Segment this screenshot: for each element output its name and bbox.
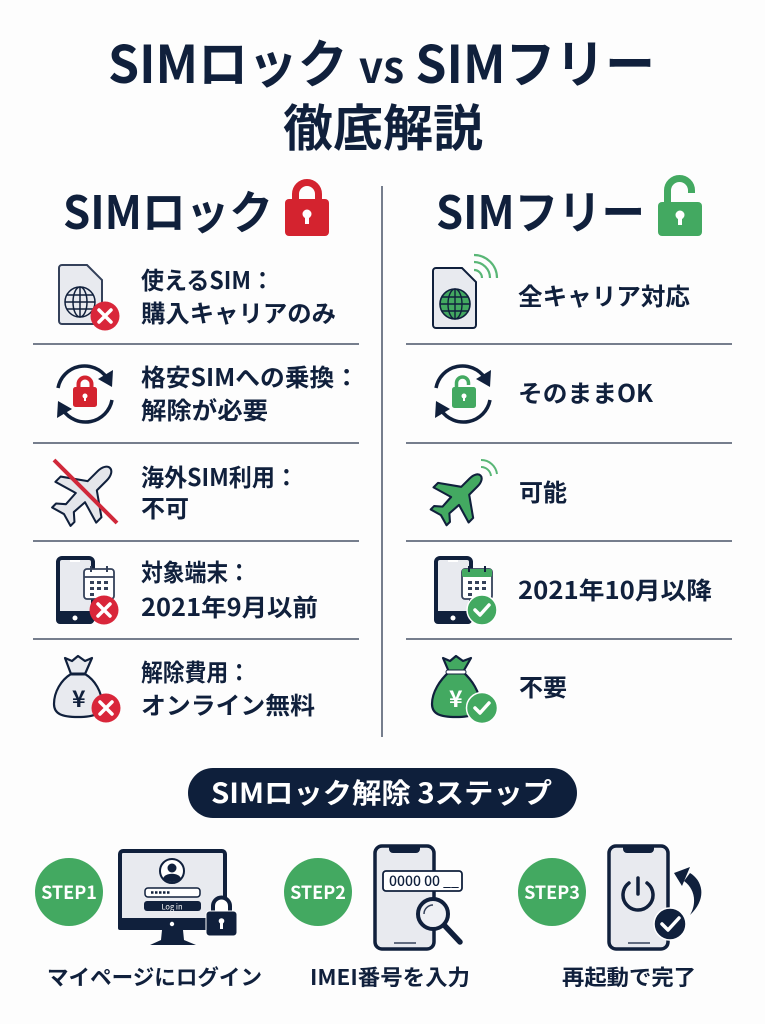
row: overseas OK [421, 458, 567, 535]
text: not required: 不要 [519, 668, 567, 703]
text: unlock fee: オンライン無料 [141, 686, 315, 721]
caption: enter IMEI: IMEI番号を入力 [310, 961, 470, 992]
panel: SIM lock column [33, 177, 359, 722]
row: target devices [56, 553, 318, 624]
text: as-is OK: そのままOK [518, 374, 654, 409]
title [108, 23, 655, 161]
caption: restart to finish: 再起動で完了 [562, 961, 696, 992]
icon: money bag with x: ¥ [72, 680, 86, 714]
row: overseas SIM [41, 448, 298, 537]
badge: STEP1: STEP1 [41, 879, 97, 905]
row: switching to budget SIM [57, 358, 359, 426]
text: target devices: 2021年9月以前 [141, 588, 318, 623]
section heading pill: 3 steps [188, 768, 577, 818]
text: usable SIM: 購入キャリアのみ [141, 294, 336, 329]
text: usable SIM: 使えるSIM： [141, 261, 274, 296]
icon: green plane with signal [421, 458, 498, 535]
row: target devices free [434, 558, 712, 625]
badge: STEP2 [284, 858, 352, 926]
text: target devices: 対象端末： [141, 553, 250, 588]
text: date free: 2021年10月以降 [518, 571, 712, 606]
panel: SIM free column [406, 177, 732, 724]
step 3 [518, 846, 701, 992]
text: overseas SIM: 不可 [141, 489, 189, 524]
row: unlock fee [54, 653, 315, 722]
icon: phone with IMEI field and magnifier [375, 846, 462, 949]
icon: monitor login with lock: Log in [161, 902, 183, 912]
icon: money bag with x [54, 656, 120, 722]
text: switching: 格安SIMへの乗換： [141, 358, 359, 393]
title: SIMロック vs SIMフリー [108, 23, 655, 98]
step 1 [35, 851, 262, 992]
icon: SIM card with x [59, 265, 120, 330]
badge: STEP2: STEP2 [290, 879, 346, 905]
icon: green money bag with check: ¥ [449, 680, 463, 714]
text: unlock fee [141, 653, 315, 721]
row: usable SIM [59, 261, 336, 330]
text: overseas SIM: 海外SIM利用： [141, 458, 298, 493]
heading: SIM free: SIMフリー [436, 177, 645, 243]
icon: phone and calendar with x [56, 558, 118, 624]
text: switching [141, 358, 359, 426]
icon: phone with IMEI field and magnifier: 0000 00 __ [389, 871, 459, 891]
text: usable SIM [141, 261, 336, 329]
text: overseas SIM [141, 458, 298, 524]
title: 徹底解説 [283, 89, 483, 161]
heading: SIM lock: SIMロック [63, 177, 273, 243]
badge: STEP3 [518, 858, 586, 926]
text: unlock fee: 解除費用： [141, 653, 250, 688]
text: switching: 解除が必要 [141, 391, 268, 426]
text: target devices [141, 553, 318, 623]
icon: monitor login with lock [118, 851, 237, 945]
badge: STEP1 [35, 858, 103, 926]
icon: phone and calendar with check [434, 558, 497, 625]
text: possible: 可能 [519, 473, 567, 508]
icon: sync arrows with green lock [435, 366, 491, 422]
step 2 [284, 846, 470, 992]
icon: SIM card with signal [433, 255, 497, 328]
text: all carriers: 全キャリア対応 [518, 277, 690, 312]
icon: red closed padlock [285, 183, 329, 236]
section heading pill: 3 steps: SIMロック解除 3ステップ [211, 772, 552, 812]
icon: phone restart with check [609, 846, 701, 949]
icon: sync arrows with red lock [57, 366, 113, 422]
row: fee free [432, 656, 567, 724]
badge: STEP3: STEP3 [524, 879, 580, 905]
row: as-is OK [435, 366, 654, 422]
row: all carriers [433, 255, 690, 328]
icon: crossed-out plane [41, 448, 130, 537]
icon: green open padlock [658, 178, 702, 236]
caption: log in: マイページにログイン [47, 961, 262, 992]
